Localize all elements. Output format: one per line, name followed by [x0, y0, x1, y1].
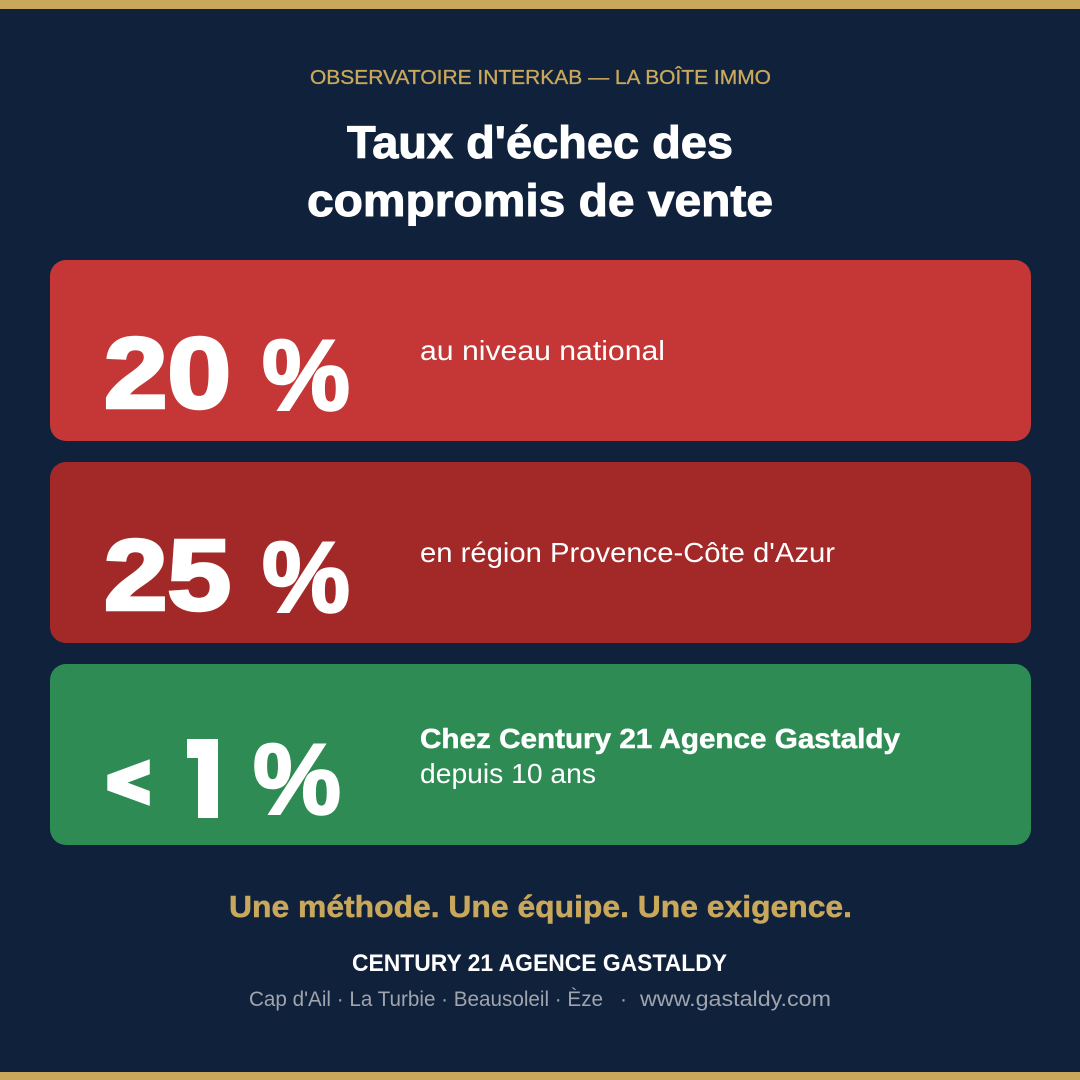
stat: 20 %: % — [262, 320, 350, 432]
eyebrow: source: OBSERVATOIRE INTERKAB — LA BOÎTE IMMO — [310, 66, 771, 89]
footer: towns and website — [249, 988, 831, 1011]
stat: less than 1 %: < — [108, 744, 149, 820]
panel: agency rate — [50, 664, 1031, 845]
label: region: en région Provence-Côte d'Azur — [420, 537, 835, 568]
stat: 20 % — [104, 318, 350, 432]
label: agency: Chez Century 21 Agence Gastaldy — [420, 723, 900, 754]
panel: regional rate — [50, 462, 1031, 643]
label: agency — [420, 723, 900, 789]
title: compromis de vente — [307, 175, 773, 226]
footer: towns and website: · — [620, 988, 627, 1011]
agency name: CENTURY 21 AGENCE GASTALDY — [352, 950, 727, 977]
top gold bar — [0, 0, 1080, 9]
label: agency: depuis 10 ans — [420, 758, 596, 789]
title: Taux d'échec des — [347, 117, 733, 168]
stat: 25 %: % — [262, 522, 350, 634]
stat: 20 %: 20 — [104, 318, 231, 430]
stat: less than 1 %: 1 — [166, 728, 249, 839]
label: national: au niveau national — [420, 335, 665, 366]
title — [307, 117, 773, 226]
stat: 25 %: 25 — [104, 520, 231, 632]
bottom gold bar — [0, 1072, 1080, 1080]
stat: 25 % — [104, 520, 350, 634]
stat: less than 1 %: % — [253, 724, 341, 836]
footer: towns and website: www.gastaldy.com — [639, 988, 831, 1011]
tagline: Une méthode. Une équipe. Une exigence. — [229, 889, 852, 924]
stat: less than 1 % — [107, 739, 340, 818]
panel: national rate — [50, 260, 1031, 441]
footer: towns and website: Cap d'Ail · La Turbie · Beausoleil · Èze — [249, 988, 603, 1011]
